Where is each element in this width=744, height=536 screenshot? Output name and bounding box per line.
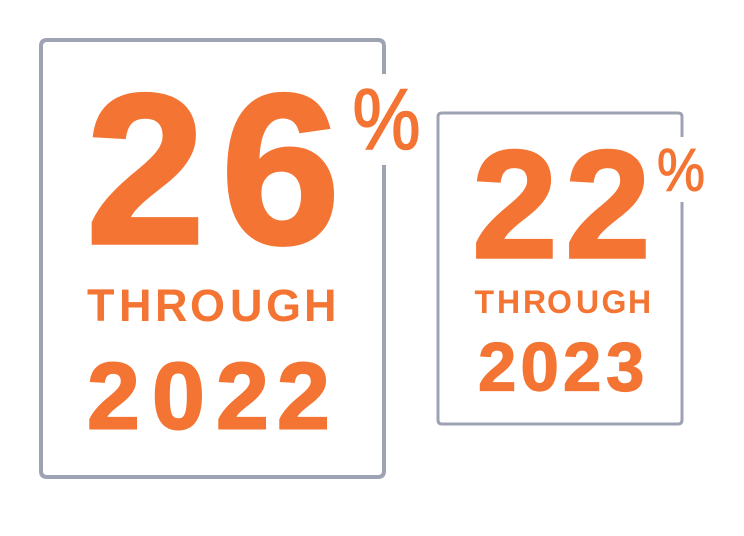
label THROUGH: THROUGH [474, 284, 651, 320]
panel: through 2022 [41, 40, 420, 477]
year 2022: 2022 [87, 344, 330, 450]
label THROUGH: THROUGH [87, 280, 336, 331]
panel border 2023 [438, 113, 682, 424]
big number 26: 26 [86, 50, 340, 289]
percent sign 22: % [657, 136, 705, 204]
percent sign 26: % [352, 72, 420, 168]
panel: through 2023 [438, 113, 705, 424]
year 2023: 2023 [478, 328, 644, 406]
big number 22: 22 [472, 118, 651, 290]
panel border 2022 [41, 40, 384, 477]
